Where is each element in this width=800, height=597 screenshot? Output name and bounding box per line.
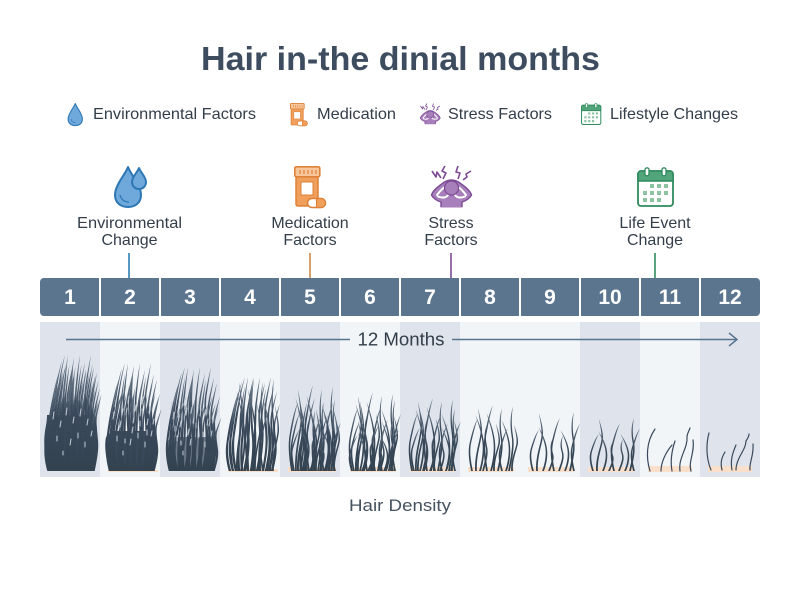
event: life event change: Life Event xyxy=(619,215,691,232)
hair: month 5 xyxy=(289,385,341,471)
arrow: 12 months xyxy=(66,330,737,350)
month bar: 5 xyxy=(304,286,316,309)
hair: month 3 xyxy=(166,367,222,471)
hair: month 6 xyxy=(349,392,401,471)
month bar: 11 xyxy=(659,286,681,309)
event: stress factors: Factors xyxy=(424,232,478,249)
legend: medication: Medication xyxy=(317,106,396,123)
month bar: 1 xyxy=(64,286,76,309)
event: stress factors: Stress xyxy=(428,215,474,232)
event: life event change xyxy=(619,168,691,278)
month bar: 10 xyxy=(598,286,622,309)
hair: month 10 xyxy=(590,418,640,471)
event: medication factors: Medication xyxy=(271,215,349,232)
icon: stressed person xyxy=(432,166,472,207)
icon: pill bottle xyxy=(295,167,326,208)
legend: environmental factors: Environmental Factors xyxy=(93,106,256,123)
event: stress factors xyxy=(424,166,478,278)
legend: stress factors xyxy=(420,104,552,124)
icon: calendar xyxy=(638,168,673,206)
month bar: 3 xyxy=(184,286,196,309)
legend: lifestyle changes xyxy=(582,103,738,124)
event: environmental change: Change xyxy=(101,232,158,249)
hair: month 11 xyxy=(647,428,693,471)
month bar: 8 xyxy=(484,286,496,309)
hair: month 1 xyxy=(44,355,102,471)
event: medication factors xyxy=(271,167,349,278)
hair: month 2 xyxy=(105,363,162,471)
event: life event change: Change xyxy=(627,232,683,249)
hair: month 4 xyxy=(226,377,280,471)
month bar: 4 xyxy=(244,286,256,309)
month bar: 12 xyxy=(718,286,742,309)
month bar xyxy=(40,278,760,316)
hair: month 7 xyxy=(409,398,461,471)
event: environmental change xyxy=(77,167,182,278)
hair: month 8 xyxy=(469,405,518,471)
hair density panel background xyxy=(40,322,760,477)
legend: environmental factors xyxy=(68,104,256,126)
legend xyxy=(68,103,738,126)
hair: month 9 xyxy=(530,412,580,471)
caption: hair density: Hair Density xyxy=(349,496,452,515)
scalp skin strips xyxy=(108,466,752,472)
month bar: 7 xyxy=(424,286,436,309)
title: Hair in-the dinial months xyxy=(201,40,600,77)
legend: medication xyxy=(290,103,396,126)
icon: water drops xyxy=(115,167,146,207)
arrow: 12 months: 12 Months xyxy=(358,330,444,350)
legend: stress factors: Stress Factors xyxy=(448,106,552,123)
legend: lifestyle changes: Lifestyle Changes xyxy=(610,106,738,123)
event: medication factors: Factors xyxy=(283,232,337,249)
hair: month 12 xyxy=(707,433,753,470)
month bar: 9 xyxy=(544,286,556,309)
month bar: 6 xyxy=(364,286,376,309)
event: environmental change: Environmental xyxy=(77,215,182,232)
month bar: 2 xyxy=(124,286,136,309)
